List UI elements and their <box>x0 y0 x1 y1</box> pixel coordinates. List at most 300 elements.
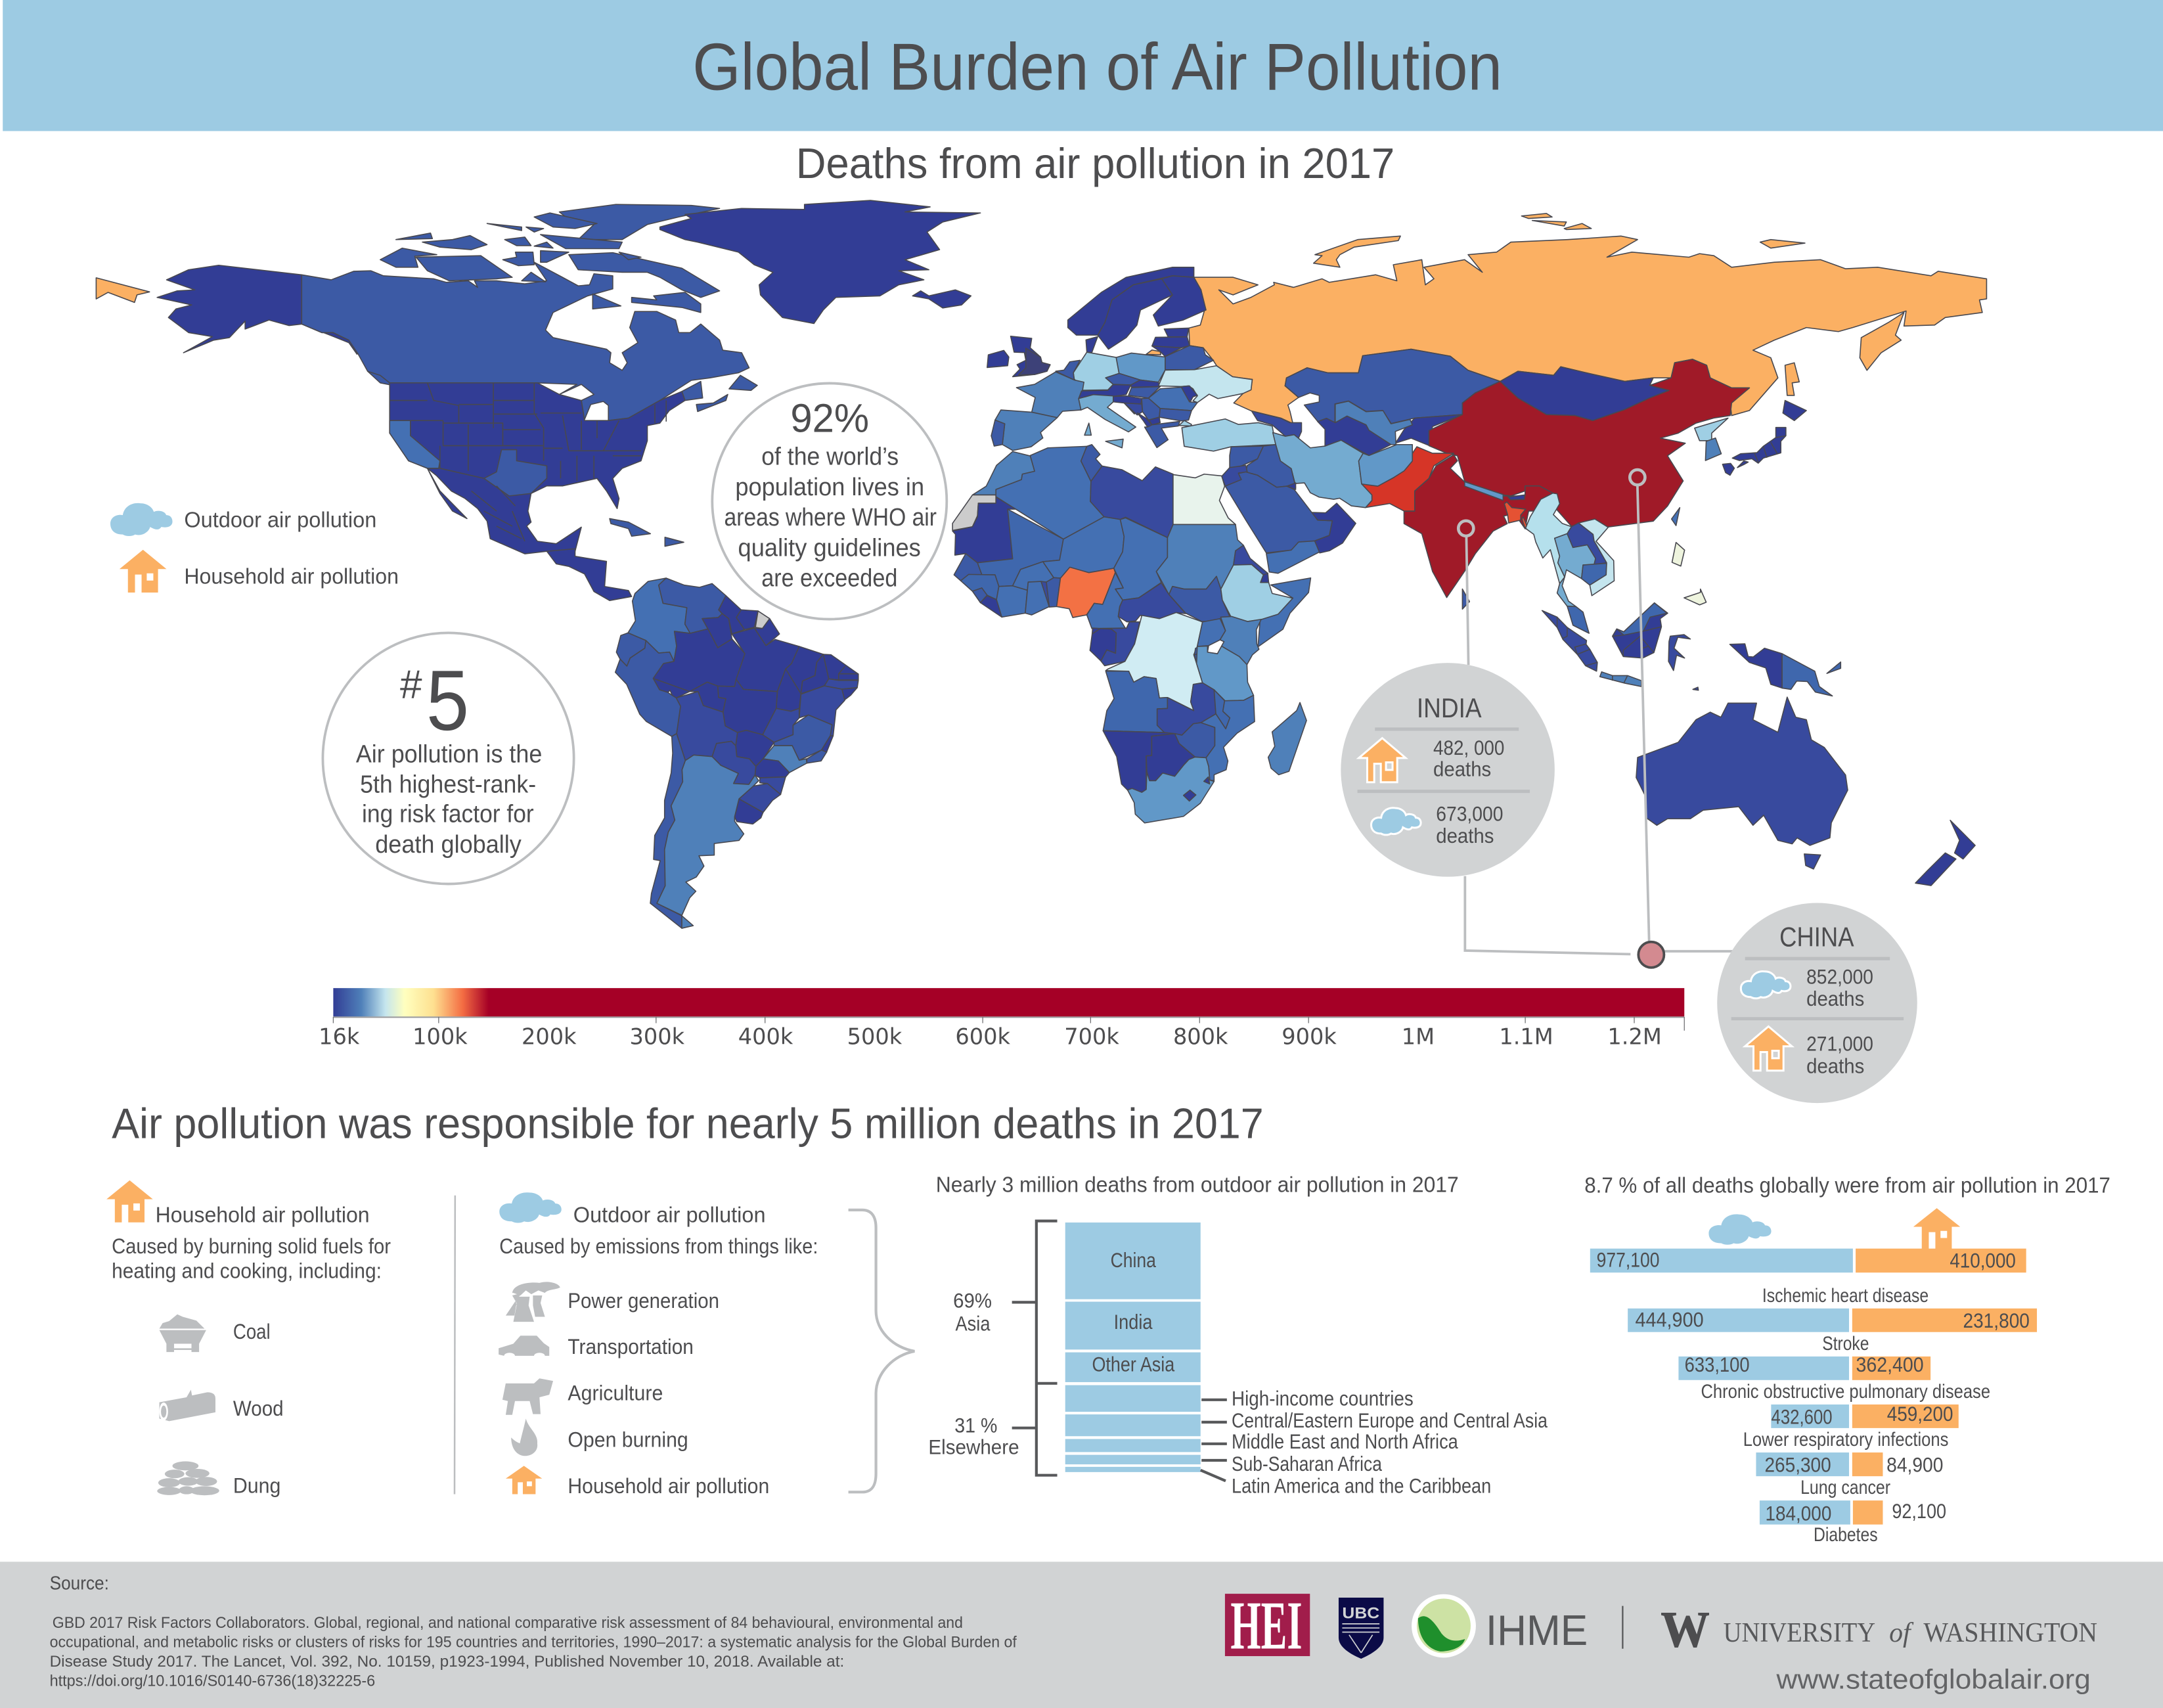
Austria and Switzerland <box>1079 384 1131 399</box>
Greenland <box>660 200 981 324</box>
Java province lines <box>1613 675 1628 683</box>
legend label: household: Household air pollution <box>184 564 399 589</box>
panel: outdoor deaths stacked bar <box>928 1173 1548 1497</box>
South Sudan <box>1169 576 1231 621</box>
Myanmar <box>1526 493 1571 583</box>
South Korea <box>1705 438 1722 461</box>
Hokkaido <box>1783 401 1806 420</box>
colour scale bar <box>319 988 1684 1049</box>
Brazil: Para <box>732 628 799 692</box>
Albania and Montenegro <box>1137 413 1152 427</box>
Indian north-east sliver <box>1522 517 1527 529</box>
panel: outdoor air pollution: Open burning <box>568 1428 688 1452</box>
Slovakia <box>1131 380 1160 387</box>
Brazil: Sao Paulo <box>763 746 807 773</box>
Lake Victoria <box>1207 640 1224 654</box>
row: lower respiratory infections: Lower respiratory infections <box>1743 1429 1948 1450</box>
Guyana <box>719 596 744 634</box>
Ghana <box>1025 581 1049 615</box>
panel: China callout: 271,000 <box>1806 1032 1873 1056</box>
Burundi <box>1194 653 1201 662</box>
logo: HEI <box>1225 1587 1310 1664</box>
Syria <box>1230 446 1263 468</box>
Guinea <box>961 574 999 600</box>
Djibouti <box>1260 573 1268 583</box>
panel: deaths by cause butterfly chart <box>1584 1173 2110 1546</box>
panel: outdoor deaths stacked bar: India <box>1114 1310 1153 1334</box>
Morocco <box>972 451 1035 495</box>
Brazil: Alagoas <box>842 688 857 700</box>
Canada mainland <box>301 262 749 420</box>
Latvia <box>1152 337 1190 348</box>
logo: University of Washington: WASHINGTON <box>1923 1618 2097 1648</box>
Slovenia and Croatia <box>1113 396 1142 414</box>
Texas <box>484 450 546 508</box>
Mexican state lines <box>472 486 525 541</box>
Venezuela <box>659 578 726 633</box>
Cambodia <box>1582 563 1607 585</box>
Ivory Coast <box>996 586 1027 617</box>
panel: deaths by cause butterfly chart: 8.7 % of all deaths globally were from air pollution in 2017 <box>1584 1173 2110 1198</box>
map region: North America and Greenland <box>96 200 981 600</box>
panel: outdoor air pollution: Household air pollution <box>568 1474 769 1498</box>
United States <box>390 383 685 508</box>
Oman <box>1312 503 1356 553</box>
Sri Lanka <box>1462 589 1469 609</box>
French Guiana <box>755 611 770 629</box>
Brazil: Bahia <box>799 686 845 736</box>
Philippines north <box>1672 543 1685 566</box>
Equatorial Guinea <box>1092 628 1100 634</box>
callout: number 5 risk factor: death globally <box>375 831 522 859</box>
total row <box>1590 1247 2026 1272</box>
Ethiopia <box>1221 564 1293 621</box>
panel: outdoor deaths stacked bar: Elsewhere <box>928 1435 1019 1459</box>
icon: cloud, China <box>1741 972 1791 999</box>
colour scale bar: 1M <box>1402 1023 1435 1049</box>
Zambia <box>1157 683 1216 735</box>
China <box>1429 359 1749 527</box>
Vietnam <box>1578 519 1614 596</box>
Bolivia <box>676 692 738 761</box>
Bulgaria <box>1159 409 1192 421</box>
panel: India callout <box>1341 663 1555 877</box>
callout: 92 percent: are exceeded <box>761 565 897 593</box>
Kuwait <box>1287 483 1296 489</box>
panel: India callout: deaths <box>1436 824 1494 847</box>
Honshu prefecture lines <box>1754 436 1786 462</box>
Nepal <box>1465 482 1503 501</box>
callout: number 5 risk factor <box>323 633 574 884</box>
row: lung cancer: 184,000 <box>1766 1501 1831 1525</box>
Madagascar <box>1268 702 1306 775</box>
panel: outdoor air pollution: Agriculture <box>568 1382 663 1405</box>
icon: household house <box>120 550 166 593</box>
panel: household air pollution: Dung <box>233 1473 280 1497</box>
Pakistan <box>1361 447 1454 511</box>
Borneo province lines <box>1613 627 1661 656</box>
panel: outdoor deaths stacked bar: High-income countries <box>1232 1387 1414 1410</box>
stacked bar segments <box>1065 1223 1201 1472</box>
Bangladesh <box>1504 502 1526 523</box>
row: COPD: 459,200 <box>1887 1402 1953 1426</box>
Brazil: Maranhao <box>786 646 823 694</box>
Argentina <box>657 755 759 915</box>
panel: outdoor air pollution: Transportation <box>568 1335 694 1359</box>
source text <box>50 1573 1017 1690</box>
Saudi Arabia <box>1225 472 1332 553</box>
New Zealand south <box>1915 853 1956 886</box>
Mexico <box>428 468 581 555</box>
Mongolia <box>1500 367 1669 420</box>
panel: household air pollution: Coal <box>233 1320 271 1343</box>
panel: China callout: CHINA <box>1779 922 1854 953</box>
Java <box>1600 672 1641 686</box>
Turkey <box>1182 419 1276 451</box>
Paraguay <box>712 741 756 784</box>
Lithuania <box>1152 346 1181 357</box>
column divider <box>454 1196 456 1494</box>
Brazil: Parana <box>755 759 790 778</box>
Brazil: northeast borders <box>839 666 859 680</box>
Iceland <box>912 290 971 308</box>
Bhutan <box>1508 495 1525 500</box>
connector dot <box>1638 942 1664 968</box>
callout leader lines <box>1458 470 1734 954</box>
Belarus <box>1165 346 1214 370</box>
Borneo <box>1613 603 1668 658</box>
map region: Europe, northern Africa, Middle East <box>952 328 1412 629</box>
logo: University of Washington: W <box>1661 1602 1710 1658</box>
row: lung cancer <box>1760 1477 1946 1525</box>
Sierra Leone <box>972 588 987 602</box>
North Macedonia <box>1149 417 1160 425</box>
panel: household air pollution: heating and cooking, including: <box>112 1259 382 1283</box>
DR Congo <box>1105 612 1203 711</box>
colour scale bar: 600k <box>955 1023 1010 1049</box>
Namibia <box>1103 730 1174 792</box>
panel: China callout: deaths <box>1806 987 1864 1010</box>
Chukotka tip <box>96 278 150 302</box>
icon: coal cart <box>160 1315 206 1352</box>
row: COPD <box>1701 1381 1990 1428</box>
Kamchatka <box>1860 313 1904 371</box>
New Zealand north <box>1950 820 1975 859</box>
France <box>1016 372 1084 418</box>
row: stroke: Stroke <box>1822 1333 1869 1355</box>
Kazakhstan <box>1285 349 1500 424</box>
panel: outdoor air pollution: Caused by emissions from things like: <box>499 1234 818 1258</box>
colour scale bar: 500k <box>847 1023 903 1049</box>
Baja California <box>428 468 467 518</box>
Canadian coastal and Arctic islands <box>368 204 757 411</box>
Central America <box>546 549 632 600</box>
panel: outdoor deaths stacked bar: China <box>1111 1248 1156 1272</box>
Denmark <box>1086 336 1098 353</box>
row: ischemic heart disease: Ischemic heart disease <box>1762 1285 1929 1307</box>
Brazil: Amapa <box>754 619 780 646</box>
callout: number 5 risk factor: 5th highest-rank- <box>360 771 536 799</box>
Russia <box>1189 236 1986 424</box>
Uzbekistan <box>1335 401 1412 445</box>
icon: house <box>1913 1208 1960 1249</box>
Brazil: Rio Grande do Sul <box>739 784 780 813</box>
callout: 92 percent: 92% <box>790 395 869 440</box>
icon: house, China <box>1745 1027 1792 1071</box>
callout: number 5 risk factor: # <box>400 662 422 707</box>
Somalia <box>1258 578 1310 647</box>
outdoor source icons <box>499 1282 560 1456</box>
logo: HEI: HEI <box>1230 1587 1303 1664</box>
Ukraine <box>1159 366 1252 403</box>
Alaska <box>157 265 301 353</box>
Malawi <box>1214 690 1230 729</box>
callout: 92 percent: areas where WHO air <box>725 504 937 531</box>
map region: South-East Asia and Pacific <box>1465 428 1840 696</box>
European Turkey <box>1179 420 1192 426</box>
Bosnia <box>1124 403 1142 415</box>
icon: power plant <box>506 1282 560 1322</box>
Brazil: Minas Gerais <box>774 715 832 760</box>
Peru <box>615 640 680 736</box>
panel: outdoor deaths stacked bar: Central/Eastern Europe and Central Asia <box>1232 1408 1548 1432</box>
panel: India callout: INDIA <box>1417 692 1482 723</box>
Brazil: Mato Grosso do Sul <box>736 730 774 767</box>
panel: outdoor air pollution: Outdoor air pollution <box>573 1203 766 1227</box>
Thai peninsula <box>1557 577 1576 606</box>
panel: China callout: deaths <box>1806 1054 1864 1077</box>
Sweden <box>1098 279 1172 349</box>
Liberia <box>981 596 1002 617</box>
household fuel icons <box>157 1315 219 1495</box>
Brazil: Acre <box>653 679 690 698</box>
Gabon <box>1090 629 1116 661</box>
Germany <box>1073 352 1119 390</box>
Timor <box>1693 687 1699 690</box>
Rwanda <box>1194 646 1202 655</box>
colour scale bar: 200k <box>522 1023 577 1049</box>
North Korea <box>1695 418 1728 441</box>
Turkmenistan <box>1318 416 1391 455</box>
source text: Disease Study 2017. The Lancet, Vol. 392, No. 10159, p1923-1994, Published November 10, 2018. Available at: <box>50 1653 844 1671</box>
icon: burning plant <box>511 1418 537 1456</box>
Russian Arctic islands <box>1521 214 1805 248</box>
Honshu <box>1732 428 1786 463</box>
Mauritania <box>952 497 1016 563</box>
Uganda <box>1197 619 1226 646</box>
Italy <box>1079 395 1136 432</box>
Benin <box>1046 577 1060 607</box>
Estonia <box>1165 328 1189 337</box>
panel: household air pollution <box>106 1180 391 1497</box>
total row: 410,000 <box>1950 1248 2016 1272</box>
Togo <box>1041 581 1049 607</box>
panel: outdoor deaths stacked bar: Other Asia <box>1092 1353 1175 1376</box>
Brazil: Roraima <box>702 614 732 648</box>
panel: outdoor deaths stacked bar: 69% <box>953 1288 992 1312</box>
Egypt <box>1173 474 1236 524</box>
row: diabetes: Diabetes <box>1814 1524 1878 1546</box>
Sumatra <box>1542 610 1597 671</box>
colour scale bar: 800k <box>1173 1023 1228 1049</box>
row: stroke: 633,100 <box>1685 1353 1750 1376</box>
panel: outdoor air pollution: Power generation <box>568 1289 719 1313</box>
Kyushu <box>1722 463 1734 475</box>
Zimbabwe <box>1174 723 1215 757</box>
Eritrea <box>1234 545 1268 575</box>
Sardinia <box>1084 423 1091 435</box>
icon: cloud, India <box>1371 808 1421 835</box>
row: stroke <box>1678 1333 1930 1380</box>
map region: South America <box>615 578 859 928</box>
row: lower respiratory infections: 265,300 <box>1764 1452 1831 1476</box>
Republic of Congo <box>1100 622 1140 665</box>
Finland <box>1153 276 1206 326</box>
Cameroon <box>1087 573 1126 629</box>
title: Global Burden of Air Pollution <box>692 31 1502 104</box>
Brazil: Rondonia <box>690 682 726 712</box>
icon: wood log <box>160 1389 215 1421</box>
Western New Guinea <box>1730 644 1782 688</box>
source text: https://doi.org/10.1016/S0140-6736(18)32225-6 <box>50 1672 375 1690</box>
icon: house, India <box>1359 738 1406 782</box>
Alaska panhandle <box>301 324 359 354</box>
panel: outdoor deaths stacked bar: Asia <box>956 1312 991 1336</box>
Tierra del Fuego <box>682 916 693 928</box>
callout: number 5 risk factor: ing risk factor for <box>362 801 534 828</box>
Brazil: Amazonas <box>653 629 745 692</box>
panel: outdoor air pollution <box>499 1192 818 1498</box>
icon: car <box>499 1336 549 1356</box>
Thailand <box>1555 533 1595 579</box>
Sumatra province lines <box>1557 617 1597 665</box>
Algeria <box>996 446 1104 539</box>
colour scale bar: 400k <box>738 1023 793 1049</box>
California <box>390 420 440 468</box>
Brazil: Rio de Janeiro <box>807 750 826 763</box>
legend label: outdoor: Outdoor air pollution <box>184 508 376 532</box>
Taiwan <box>1672 508 1680 526</box>
Moldova <box>1181 386 1197 401</box>
Greece <box>1145 421 1180 447</box>
England local borders <box>1019 348 1050 375</box>
Brazil: Ceara and northeast tip <box>823 654 859 680</box>
icon: house <box>106 1180 153 1223</box>
Burkina Faso <box>1013 562 1054 590</box>
Shikoku <box>1737 461 1748 468</box>
panel: outdoor deaths stacked bar: 31 % <box>954 1414 997 1437</box>
source text: occupational, and metabolic risks or clusters of risks for 195 countries and territories, 1990–2017: a systematic analysis for the Global Burden of <box>50 1634 1017 1652</box>
Hispaniola <box>665 537 684 547</box>
Portugal <box>991 420 1005 446</box>
Australia <box>1636 697 1848 845</box>
South Africa <box>1128 757 1214 823</box>
Brazil: Tocantins <box>776 669 801 711</box>
logo: UBC: UBC <box>1342 1604 1379 1622</box>
row: lung cancer: 92,100 <box>1892 1499 1946 1523</box>
colour scale bar: 1.1M <box>1499 1023 1553 1049</box>
panel: India callout: 482, 000 <box>1433 736 1504 759</box>
Malaysian Borneo <box>1617 603 1667 635</box>
Brazil: Santa Catarina <box>760 777 786 794</box>
panel: outdoor deaths stacked bar: Sub-Saharan Africa <box>1232 1452 1382 1475</box>
row: stroke: 362,400 <box>1856 1353 1924 1376</box>
Tanzania <box>1197 646 1253 701</box>
colour scale bar: 300k <box>630 1023 685 1049</box>
logo: University of Washington: UNIVERSITY <box>1724 1618 1875 1648</box>
Yemen <box>1266 541 1320 573</box>
colour scale bar: 1.2M <box>1607 1023 1662 1049</box>
icon: cloud <box>1708 1214 1772 1245</box>
Jordan and Lebanon <box>1222 465 1247 486</box>
row: ischemic heart disease: 231,800 <box>1963 1309 2030 1332</box>
icon: dung pile <box>157 1462 219 1495</box>
Niger <box>1043 517 1124 578</box>
map heading: Deaths from air pollution in 2017 <box>796 139 1394 187</box>
Papua New Guinea <box>1782 654 1833 696</box>
Novaya Zemlya <box>1314 236 1400 267</box>
panel: India callout: deaths <box>1433 757 1491 780</box>
panel: household air pollution: Caused by burning solid fuels for <box>112 1234 391 1258</box>
Libya <box>1090 466 1173 537</box>
Philippines south <box>1684 589 1706 605</box>
row: COPD: Chronic obstructive pulmonary disease <box>1701 1381 1990 1403</box>
Ecuador <box>616 633 646 666</box>
logo: University of Washington: of <box>1889 1618 1914 1648</box>
Sicily <box>1105 439 1123 448</box>
Ireland <box>987 350 1009 367</box>
icon: small house <box>506 1466 542 1494</box>
India <box>1404 455 1553 598</box>
Cuba <box>610 518 650 536</box>
row: lung cancer: Lung cancer <box>1800 1477 1890 1498</box>
Czechia <box>1105 373 1140 385</box>
colour scale bar: 700k <box>1064 1023 1119 1049</box>
Brazil: Goias <box>763 708 799 742</box>
header band <box>3 0 2163 131</box>
Senegal <box>954 554 982 581</box>
logo: UBC <box>1339 1598 1383 1659</box>
Serbia <box>1142 398 1160 420</box>
Mozambique <box>1201 695 1255 780</box>
Sulawesi <box>1668 635 1690 671</box>
icon: cloud <box>499 1192 562 1223</box>
panel: outdoor deaths stacked bar: Latin America and the Caribbean <box>1232 1473 1491 1497</box>
Great Britain <box>1011 336 1050 376</box>
Brazil: Piaui <box>801 654 829 694</box>
map region: Russia, Asia and Oceania <box>1068 214 1986 886</box>
Brazil: Espirito Santo <box>822 736 833 752</box>
colour scale bar: 900k <box>1282 1023 1337 1049</box>
panel: India callout: 673,000 <box>1436 802 1504 826</box>
source text: GBD 2017 Risk Factors Collaborators. Global, regional, and national comparative risk assessment of 84 behavioural, environmental and <box>53 1614 963 1632</box>
colour scale bar: 16k <box>319 1023 360 1049</box>
panel: outdoor deaths stacked bar: Middle East and North Africa <box>1232 1429 1458 1453</box>
Western Sahara <box>952 495 996 530</box>
total row: 977,100 <box>1597 1247 1659 1271</box>
row: lower respiratory infections <box>1743 1429 1948 1476</box>
callout: 92 percent: population lives in <box>735 474 924 501</box>
callout: 92 percent: quality guidelines <box>738 534 921 562</box>
Central African Republic <box>1118 583 1186 622</box>
Iran <box>1273 432 1372 508</box>
Tasmania <box>1804 854 1821 869</box>
Poland <box>1116 353 1165 382</box>
section heading: Air pollution was responsible for nearly 5 million deaths in 2017 <box>112 1100 1264 1148</box>
panel: China callout <box>1717 903 1917 1103</box>
Lesotho <box>1184 790 1196 801</box>
logo: University of Washington <box>1661 1602 2097 1658</box>
